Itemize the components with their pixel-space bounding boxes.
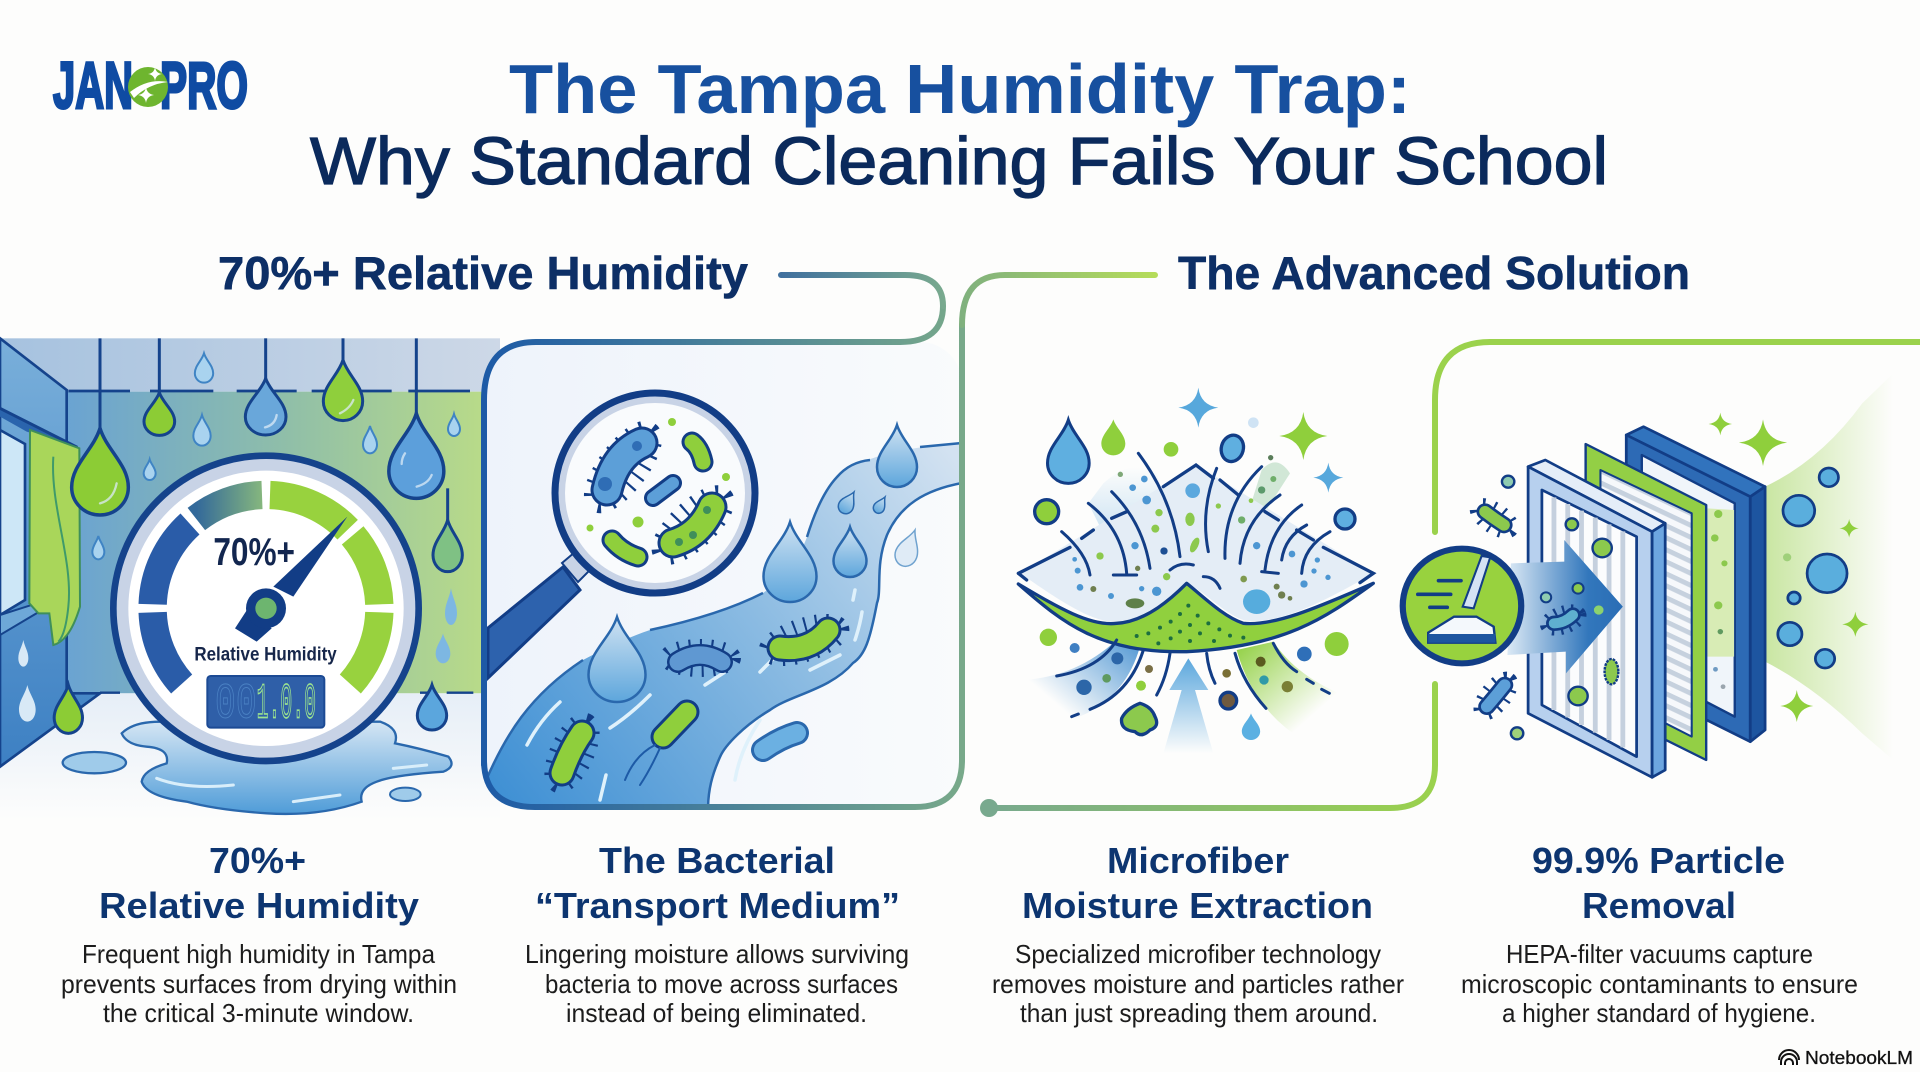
caption: 99.9% Particle Removal: HEPA-filter vacuums capture — [1506, 939, 1813, 969]
caption: 99.9% Particle Removal: a higher standard of hygiene. — [1502, 998, 1816, 1028]
caption: 70%+ Relative Humidity: the critical 3-minute window. — [103, 998, 414, 1028]
title: Why Standard Cleaning Fails Your School — [310, 124, 1608, 199]
caption: 70%+ Relative Humidity: 70%+ — [209, 840, 306, 881]
caption: Microfiber Moisture Extraction: Moisture Extraction — [1022, 885, 1373, 926]
decorative drops, stars and spheres — [1035, 388, 1355, 740]
bacterium on arrow — [1544, 607, 1583, 633]
caption: Microfiber Moisture Extraction: than just spreading them around. — [1020, 998, 1378, 1028]
middle filter — [1586, 444, 1706, 760]
caption: The Bacterial Transport Medium — [525, 840, 909, 1028]
panel: microfiber extraction — [1018, 388, 1373, 753]
caption: The Bacterial Transport Medium: bacteria to move across surfaces — [545, 969, 898, 999]
bacterium: blue — [1476, 675, 1515, 717]
watermark: NotebookLM: NotebookLM — [1805, 1048, 1913, 1068]
clean-air glow — [1765, 373, 1893, 760]
logo: JAN-PRO: PRO — [160, 48, 248, 122]
caption: 70%+ Relative Humidity: Relative Humidity — [99, 885, 419, 926]
bacterium: green rod lower — [612, 540, 638, 557]
puddle — [63, 722, 452, 814]
mould on wall — [29, 430, 80, 645]
heading: The Advanced Solution: The Advanced Solution — [1178, 247, 1690, 299]
magnifying glass — [488, 393, 755, 678]
caption: The Bacterial Transport Medium: The Bacterial — [599, 840, 835, 881]
water blob — [763, 733, 797, 750]
caption: 70%+ Relative Humidity: prevents surfaces from drying within — [61, 969, 457, 999]
bacterium: green flagellate — [625, 712, 687, 785]
front filter — [1528, 460, 1665, 777]
caption: 70%+ Relative Humidity — [61, 840, 457, 1028]
bacterium: green in stream — [764, 616, 844, 664]
panel: bacterial transport medium — [484, 342, 962, 810]
particles in arrow — [1541, 583, 1604, 633]
caption: Microfiber Moisture Extraction: Microfiber — [1107, 840, 1289, 881]
logo: JAN-PRO: JAN — [53, 48, 133, 122]
fibers — [1057, 453, 1330, 717]
logo: JAN-PRO — [53, 48, 248, 122]
caption: Microfiber Moisture Extraction — [992, 840, 1404, 1028]
back filter — [1626, 427, 1765, 742]
bacteria in lens — [585, 418, 733, 563]
small drops — [18, 353, 460, 722]
connector: upper segment to solution heading — [962, 275, 1155, 325]
left wall — [0, 338, 100, 767]
bacterium: small blue rod — [653, 483, 673, 498]
connector: panel two lower edge — [484, 325, 962, 807]
bacterium: blue in stream — [667, 647, 733, 669]
microfiber cloth — [1018, 465, 1373, 652]
upward arrow — [1163, 658, 1213, 753]
water stream — [484, 443, 962, 810]
heading: 70%+ Relative Humidity: 70%+ Relative Humidity — [218, 247, 748, 299]
caption: 70%+ Relative Humidity: Frequent high humidity in Tampa — [82, 939, 436, 969]
connector: solution frame — [980, 342, 1920, 817]
clean air bubbles and sparkles — [1709, 413, 1868, 722]
airborne bacteria — [1473, 476, 1523, 739]
caption: 99.9% Particle Removal — [1461, 840, 1858, 1028]
gauge segments — [153, 495, 379, 684]
title: The Tampa Humidity Trap: — [509, 50, 1411, 128]
digital display: 00 — [215, 676, 257, 733]
drops — [54, 360, 462, 733]
connector: panel two top edge — [484, 306, 943, 765]
caption: 99.9% Particle Removal: 99.9% Particle — [1532, 840, 1785, 881]
panel: HEPA filtration — [1403, 373, 1893, 777]
stream bacteria — [546, 616, 844, 789]
cloth sprays — [1023, 462, 1347, 740]
caption: The Bacterial Transport Medium: Lingering moisture allows surviving — [525, 939, 909, 969]
bacterium: large green — [653, 487, 733, 563]
gauge: 1.0.0 — [257, 676, 316, 733]
panel: humidity scene — [0, 338, 500, 820]
title — [310, 50, 1608, 199]
gauge — [113, 456, 419, 761]
caption: The Bacterial Transport Medium: “Transport Medium” — [535, 885, 900, 926]
hanging drop strings — [100, 338, 448, 523]
drop highlights — [100, 400, 432, 503]
bacterium: green — [1473, 501, 1515, 536]
bacterium: green lower left — [546, 717, 598, 789]
caption: 99.9% Particle Removal: microscopic contaminants to ensure — [1461, 969, 1858, 999]
green layer weave — [1135, 604, 1245, 645]
vacuum icon — [1403, 549, 1521, 663]
needle — [235, 517, 347, 642]
bacterium: large blue — [585, 423, 661, 511]
gauge reading: 70%+ — [213, 530, 295, 574]
digital display — [207, 676, 324, 733]
caption: 99.9% Particle Removal: Removal — [1582, 885, 1736, 926]
caption: Microfiber Moisture Extraction: Specialized microfiber technology — [1015, 939, 1381, 969]
window — [0, 408, 78, 635]
caption: The Bacterial Transport Medium: instead of being eliminated. — [566, 998, 867, 1028]
gauge label: Relative Humidity — [194, 645, 337, 666]
particles — [1072, 476, 1331, 614]
bacterium: green rod — [692, 442, 703, 462]
water drops — [588, 425, 925, 702]
connector: link to humidity heading — [781, 275, 943, 306]
suction arrow — [1507, 540, 1623, 673]
caption: Microfiber Moisture Extraction: removes moisture and particles rather — [992, 969, 1404, 999]
